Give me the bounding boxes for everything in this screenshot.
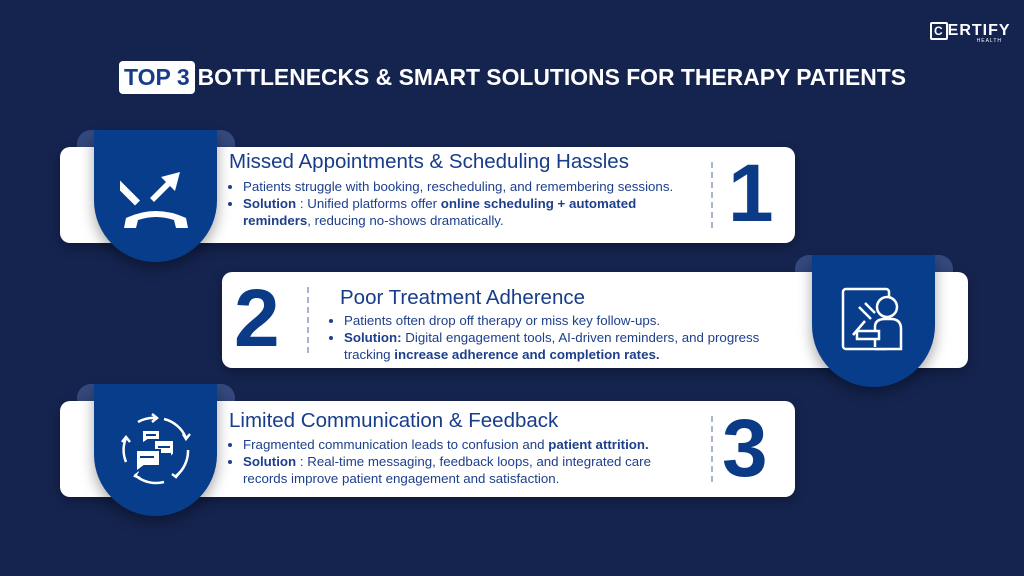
text 1: Patients struggle with booking, rescheduling, and remembering sessions. — [243, 179, 673, 194]
heading 3: Limited Communication & Feedback — [229, 409, 558, 432]
text 2 — [329, 313, 759, 362]
text 3: Fragmented communication leads to confusion and patient attrition. — [243, 437, 649, 452]
logo: CERTIFY — [934, 22, 1011, 39]
text 1: Solution : Unified platforms offer online scheduling + automated reminders, reducing no-shows dramatically. — [243, 196, 636, 228]
heading 1: Missed Appointments & Scheduling Hassles — [229, 150, 629, 173]
text 1 — [228, 179, 673, 228]
text 2: Patients often drop off therapy or miss key follow-ups. — [344, 313, 660, 328]
title: BOTTLENECKS & SMART SOLUTIONS FOR THERAPY PATIENTS — [198, 64, 906, 90]
heading 2: Poor Treatment Adherence — [340, 286, 585, 309]
title: TOP 3 — [124, 64, 190, 90]
text 3 — [228, 437, 651, 486]
logo: HEALTH — [977, 38, 1002, 44]
icon: phone missed — [94, 130, 217, 262]
number 3: 3 — [722, 403, 768, 494]
panel 1 — [58, 130, 798, 272]
text 2: Solution: Digital engagement tools, AI-driven reminders, and progress tracking increase adherence and completion rates. — [344, 330, 759, 362]
number 2: 2 — [234, 273, 280, 364]
icon: person with gavel — [812, 255, 935, 387]
panel 2 — [220, 255, 970, 396]
icon: chat cycle — [94, 384, 217, 516]
number 1: 1 — [728, 148, 774, 239]
text 3: Solution : Real-time messaging, feedback loops, and integrated care records improve patient engagement and satisfaction. — [243, 454, 651, 486]
panel 3 — [58, 384, 798, 526]
